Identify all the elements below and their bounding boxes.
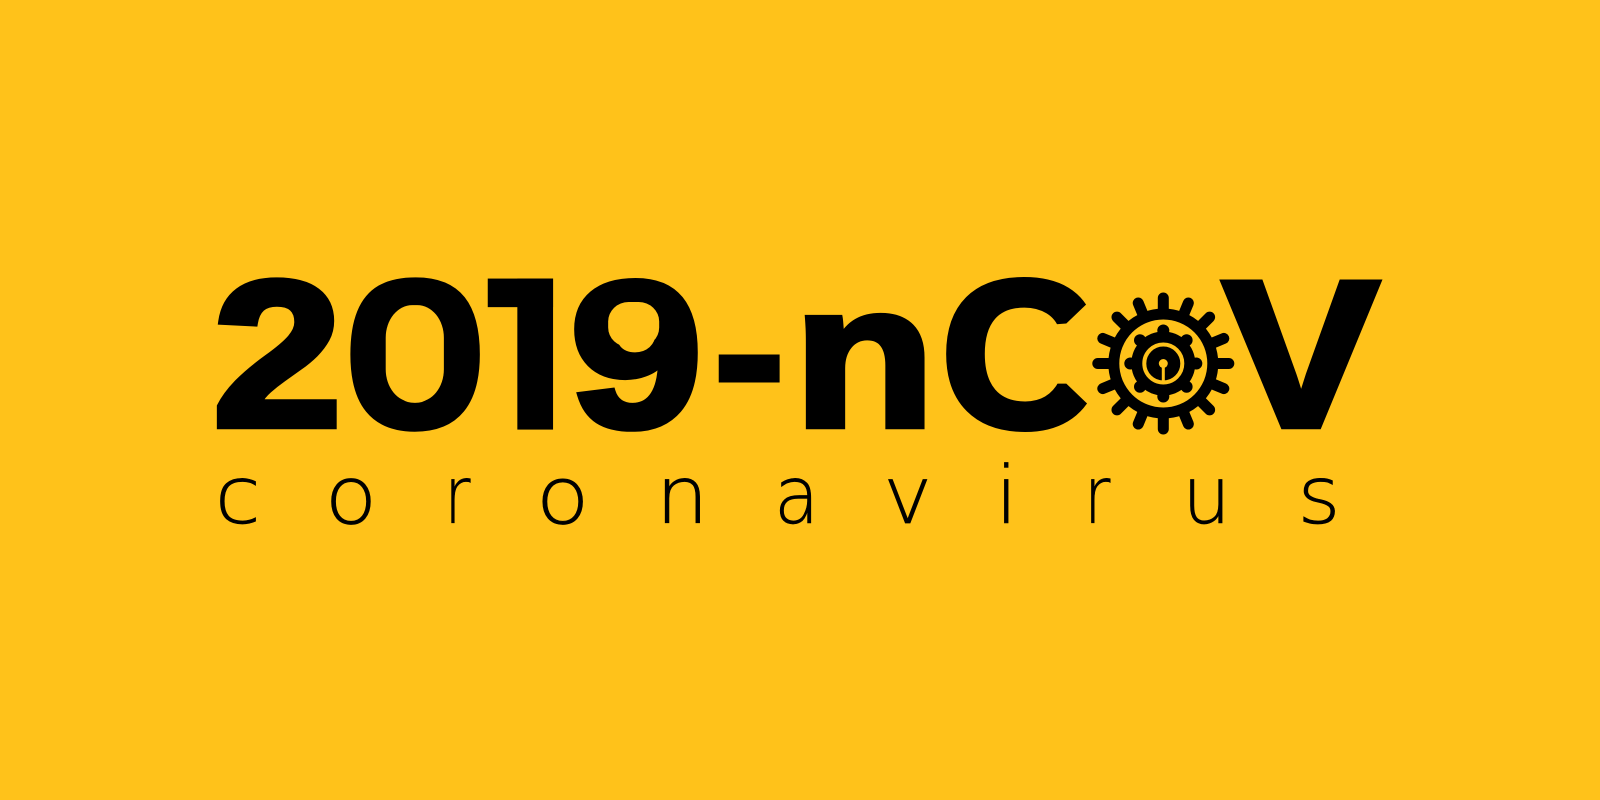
- title: 2019-nCoV: 9: [570, 238, 703, 471]
- title: 2019-nCoV: C: [941, 238, 1098, 472]
- subtitle: coronavirus: v: [883, 451, 932, 543]
- outer ring: [1114, 314, 1213, 413]
- subtitle: coronavirus: n: [656, 451, 709, 542]
- subtitle: coronavirus: r: [444, 449, 471, 542]
- subtitle: coronavirus: r: [1084, 449, 1111, 542]
- infographic canvas: [216, 277, 1382, 525]
- title: 2019-nCoV: -: [714, 252, 784, 454]
- title: 2019-nCoV: V: [1223, 238, 1379, 470]
- subtitle: coronavirus: a: [774, 450, 819, 543]
- icon: virus replacing the letter o: [1098, 298, 1229, 429]
- title: 2019-nCoV: 1: [476, 242, 589, 470]
- subtitle: coronavirus: o: [536, 449, 590, 542]
- title: 2019-nCoV: 2: [212, 238, 342, 470]
- subtitle: coronavirus: i: [995, 449, 1018, 542]
- title: 2019-nCoV: [216, 277, 1382, 432]
- subtitle: coronavirus: u: [1182, 451, 1231, 542]
- title: 2019-nCoV: n: [793, 242, 935, 470]
- subtitle: coronavirus: o: [325, 450, 377, 542]
- core ring and nucleus: [1144, 344, 1182, 382]
- subtitle: coronavirus: c: [215, 450, 261, 542]
- title: 2019-nCoV: 0: [344, 237, 487, 471]
- subtitle: coronavirus: [215, 449, 1341, 543]
- inner gear: [1124, 324, 1202, 402]
- outer spikes: [1098, 298, 1229, 429]
- subtitle: coronavirus: s: [1298, 451, 1341, 543]
